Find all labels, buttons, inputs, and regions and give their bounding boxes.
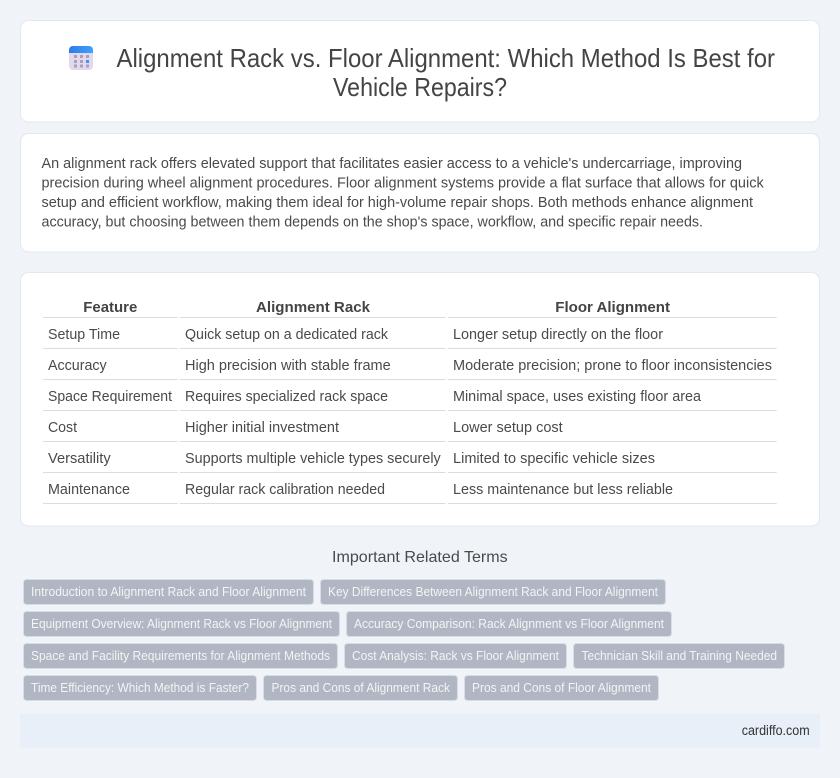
title bbox=[116, 45, 775, 102]
title: Alignment Rack vs. Floor Alignment: Which Method Is Best for bbox=[116, 45, 775, 73]
table row: maintenance bbox=[48, 481, 673, 498]
table row: versatility: Limited to specific vehicle sizes bbox=[453, 450, 655, 467]
tag bbox=[574, 644, 784, 668]
tag: Pros and Cons of Alignment Rack bbox=[272, 680, 450, 695]
table row: cost bbox=[48, 419, 563, 436]
table row: space requirement bbox=[48, 388, 702, 405]
tag bbox=[24, 580, 314, 604]
icon: calendar bbox=[69, 46, 93, 70]
table row: maintenance: Maintenance bbox=[48, 481, 130, 498]
tag list: related terms bbox=[24, 580, 784, 700]
table row: setup time: Setup Time bbox=[48, 326, 120, 343]
table row: accuracy bbox=[48, 357, 772, 374]
table row: cost: Cost bbox=[48, 419, 78, 436]
title: Vehicle Repairs? bbox=[333, 74, 507, 102]
tag: Pros and Cons of Floor Alignment bbox=[472, 680, 651, 695]
table header row: Feature bbox=[83, 299, 137, 316]
table row: versatility bbox=[48, 450, 655, 467]
tag bbox=[464, 676, 658, 700]
tag bbox=[346, 612, 672, 636]
tag bbox=[24, 612, 340, 636]
tag bbox=[24, 676, 256, 700]
table row: cost: Lower setup cost bbox=[453, 419, 563, 436]
text block: summary: accuracy, but choosing between them depends on the shop's space, workflow, and specific repair needs. bbox=[42, 214, 703, 230]
table header row bbox=[83, 299, 670, 316]
heading: important related terms: Important Related Terms bbox=[332, 549, 508, 566]
table row: setup time: Quick setup on a dedicated rack bbox=[185, 326, 388, 343]
footer credit: cardiffo.com bbox=[742, 723, 810, 738]
tag: Key Differences Between Alignment Rack and Floor Alignment bbox=[328, 584, 658, 599]
panel: comparison table bbox=[20, 272, 820, 526]
table row: accuracy: High precision with stable frame bbox=[185, 357, 391, 374]
table row: space requirement: Space Requirement bbox=[48, 388, 173, 405]
text block: summary: setup and efficient workflow, making them ideal for high-volume repair shops. Both methods enhance alignment bbox=[42, 194, 754, 211]
tag: Equipment Overview: Alignment Rack vs Floor Alignment bbox=[31, 616, 332, 631]
table row: maintenance: Regular rack calibration needed bbox=[185, 481, 385, 498]
text block: summary: precision during wheel alignment procedures. Floor alignment systems provide a flat surface that allows for quick bbox=[42, 174, 764, 192]
table row: setup time bbox=[48, 326, 663, 343]
table header row: Alignment Rack bbox=[256, 299, 371, 316]
tag bbox=[320, 580, 666, 604]
panel: summary paragraph bbox=[20, 134, 820, 252]
panel: title header bbox=[20, 20, 820, 122]
tag bbox=[264, 676, 458, 700]
tag: Technician Skill and Training Needed bbox=[582, 648, 777, 663]
table row: space requirement: Minimal space, uses existing floor area bbox=[453, 388, 702, 405]
text block: summary: An alignment rack offers elevated support that facilitates easier access to a vehicle's undercarriage, improving bbox=[42, 155, 742, 172]
table row: accuracy: Accuracy bbox=[48, 357, 107, 374]
tag: Time Efficiency: Which Method is Faster? bbox=[31, 680, 249, 695]
table row: maintenance: Less maintenance but less reliable bbox=[453, 481, 673, 498]
table row: cost: Higher initial investment bbox=[185, 419, 340, 436]
text block: summary bbox=[42, 155, 764, 230]
table row: space requirement: Requires specialized rack space bbox=[185, 388, 388, 405]
tag: Cost Analysis: Rack vs Floor Alignment bbox=[352, 648, 559, 663]
table row: accuracy: Moderate precision; prone to floor inconsistencies bbox=[453, 357, 772, 374]
tag: Accuracy Comparison: Rack Alignment vs Floor Alignment bbox=[354, 616, 664, 631]
table row: versatility: Supports multiple vehicle types securely bbox=[185, 450, 441, 467]
footer bar bbox=[20, 714, 820, 748]
table header row: Floor Alignment bbox=[555, 299, 670, 316]
tag bbox=[24, 644, 338, 668]
tag bbox=[344, 644, 566, 668]
tag: Introduction to Alignment Rack and Floor Alignment bbox=[31, 584, 306, 599]
tag: Space and Facility Requirements for Alignment Methods bbox=[31, 648, 330, 663]
table row: versatility: Versatility bbox=[48, 450, 111, 467]
table row: setup time: Longer setup directly on the floor bbox=[453, 326, 663, 343]
